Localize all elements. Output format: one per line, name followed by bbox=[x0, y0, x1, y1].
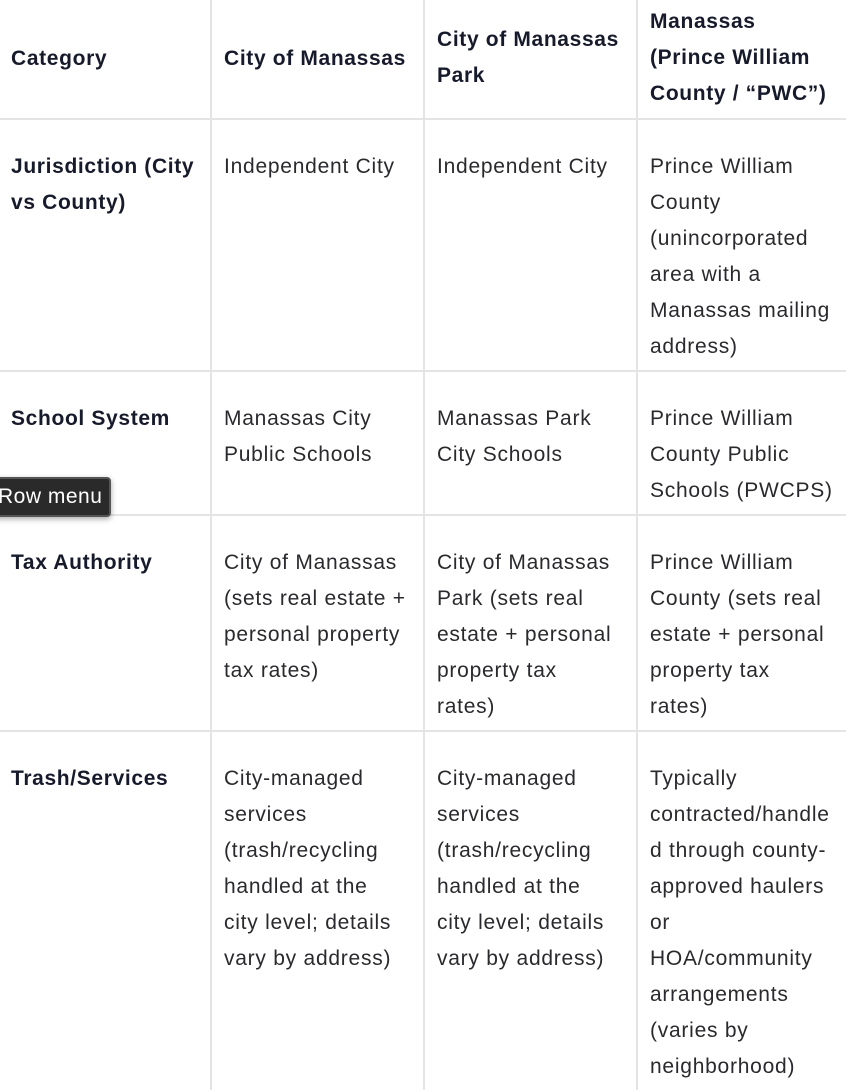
cell: jurisdiction park: Independent City bbox=[437, 155, 608, 178]
cell: tax manassas: (sets real estate + bbox=[224, 587, 406, 610]
header: PWC: (Prince William bbox=[650, 46, 810, 69]
row label: tax authority: Tax Authority bbox=[11, 551, 152, 574]
cell: trash manassas: services bbox=[224, 803, 307, 826]
cell: trash pwc: neighborhood) bbox=[650, 1055, 795, 1078]
cell: jurisdiction pwc: address) bbox=[650, 335, 738, 358]
cell: trash park: handled at the bbox=[437, 875, 581, 898]
cell: trash pwc: (varies by bbox=[650, 1019, 749, 1042]
cell: tax pwc: County (sets real bbox=[650, 587, 821, 610]
cell: jurisdiction pwc: County bbox=[650, 191, 721, 214]
cell: school manassas: Manassas City bbox=[224, 407, 371, 430]
row label: jurisdiction bbox=[11, 155, 194, 214]
cell: school pwc: Prince William bbox=[650, 407, 794, 430]
cell: school manassas bbox=[224, 407, 372, 466]
header: manassas park bbox=[437, 28, 619, 87]
cell: trash pwc: approved haulers bbox=[650, 875, 824, 898]
cell: trash pwc: or bbox=[650, 911, 670, 934]
cell: trash manassas: City-managed bbox=[224, 767, 364, 790]
cell: tax park: estate + personal bbox=[437, 623, 611, 646]
cell: tax pwc bbox=[650, 551, 824, 718]
cell: trash park: services bbox=[437, 803, 520, 826]
cell: trash pwc: d through county- bbox=[650, 839, 826, 862]
row label: trash/services: Trash/Services bbox=[11, 767, 168, 790]
cell: jurisdiction pwc: Prince William bbox=[650, 155, 794, 178]
cell: school pwc: Schools (PWCPS) bbox=[650, 479, 833, 502]
cell: tax park bbox=[437, 551, 611, 718]
header: manassas park: City of Manassas bbox=[437, 28, 619, 51]
cell: tax park: property tax bbox=[437, 659, 557, 682]
cell: school park: City Schools bbox=[437, 443, 563, 466]
cell: jurisdiction pwc: Manassas mailing bbox=[650, 299, 830, 322]
cell: trash manassas: vary by address) bbox=[224, 947, 391, 970]
header: PWC: County / “PWC”) bbox=[650, 82, 827, 105]
cell: jurisdiction pwc: (unincorporated bbox=[650, 227, 808, 250]
cell: trash manassas: city level; details bbox=[224, 911, 391, 934]
cell: school pwc bbox=[650, 407, 833, 502]
cell: school park: Manassas Park bbox=[437, 407, 591, 430]
cell: tax pwc: Prince William bbox=[650, 551, 794, 574]
cell: tax manassas: City of Manassas bbox=[224, 551, 397, 574]
cell: trash manassas: (trash/recycling bbox=[224, 839, 378, 862]
cell: school pwc: County Public bbox=[650, 443, 789, 466]
cell: trash manassas bbox=[224, 767, 391, 970]
cell: trash park bbox=[437, 767, 604, 970]
cell: trash pwc: HOA/community bbox=[650, 947, 813, 970]
cell: school park bbox=[437, 407, 591, 466]
cell: jurisdiction pwc: area with a bbox=[650, 263, 761, 286]
cell: trash park: city level; details bbox=[437, 911, 604, 934]
cell: trash pwc: contracted/handle bbox=[650, 803, 830, 826]
cell: trash park: vary by address) bbox=[437, 947, 604, 970]
cell: tax park: City of Manassas bbox=[437, 551, 610, 574]
header: manassas park: Park bbox=[437, 64, 485, 87]
cell: trash park: (trash/recycling bbox=[437, 839, 591, 862]
row label: jurisdiction: Jurisdiction (City bbox=[11, 155, 194, 178]
header: category: Category bbox=[11, 47, 107, 70]
cell: tax park: Park (sets real bbox=[437, 587, 584, 610]
cell: trash pwc bbox=[650, 767, 830, 1078]
cell: tax park: rates) bbox=[437, 695, 495, 718]
tooltip: row menu: Row menu bbox=[0, 485, 102, 508]
row label: school system: School System bbox=[11, 407, 170, 430]
cell: tax manassas: tax rates) bbox=[224, 659, 319, 682]
cell: jurisdiction manassas: Independent City bbox=[224, 155, 395, 178]
row label: jurisdiction: vs County) bbox=[11, 191, 126, 214]
cell: tax pwc: estate + personal bbox=[650, 623, 824, 646]
header: PWC bbox=[650, 10, 827, 105]
cell: trash manassas: handled at the bbox=[224, 875, 368, 898]
cell: tax manassas: personal property bbox=[224, 623, 400, 646]
cell: school manassas: Public Schools bbox=[224, 443, 372, 466]
cell: tax pwc: rates) bbox=[650, 695, 708, 718]
cell: tax pwc: property tax bbox=[650, 659, 770, 682]
cell: trash pwc: arrangements bbox=[650, 983, 789, 1006]
cell: trash pwc: Typically bbox=[650, 767, 737, 790]
header: PWC: Manassas bbox=[650, 10, 756, 33]
tooltip: row menu bbox=[0, 477, 111, 517]
cell: jurisdiction pwc bbox=[650, 155, 830, 358]
cell: trash park: City-managed bbox=[437, 767, 577, 790]
cell: tax manassas bbox=[224, 551, 406, 682]
header: city of manassas: City of Manassas bbox=[224, 47, 406, 70]
